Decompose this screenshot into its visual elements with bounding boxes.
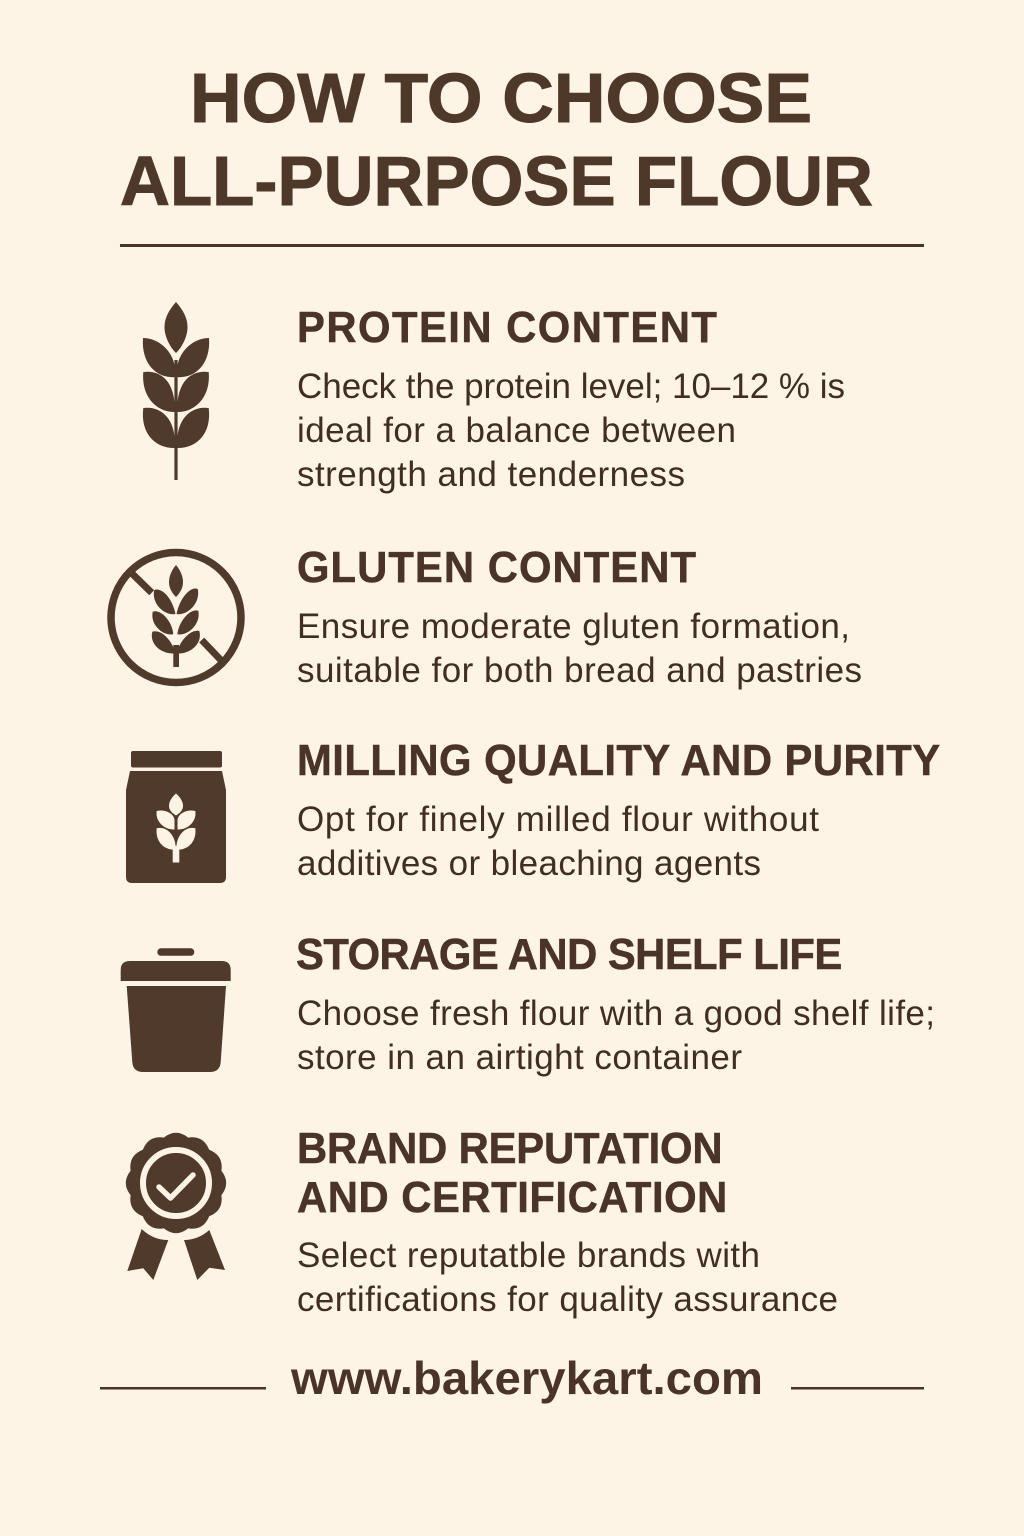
text: gluten content description <box>297 607 862 690</box>
text: milling quality description <box>297 800 819 883</box>
title <box>120 59 873 220</box>
heading: brand reputation and certification: AND CERTIFICATION <box>297 1173 727 1222</box>
heading: gluten content: GLUTEN CONTENT <box>297 543 696 592</box>
text: gluten content description: Ensure moderate gluten formation, <box>297 607 850 646</box>
text: brand description: certifications for quality assurance <box>297 1280 838 1319</box>
heading: brand reputation and certification: BRAND REPUTATION <box>297 1124 723 1173</box>
text: brand description <box>297 1236 838 1319</box>
title: HOW TO CHOOSE <box>190 59 812 137</box>
heading: storage and shelf life: STORAGE AND SHELF LIFE <box>296 930 842 979</box>
text: storage description: store in an airtight container <box>297 1038 742 1077</box>
heading: milling quality and purity: MILLING QUALITY AND PURITY <box>297 736 940 785</box>
icon: flour bag <box>126 751 226 883</box>
icon: wheat <box>143 302 209 480</box>
text: protein content description: strength and tenderness <box>297 455 685 494</box>
text: protein content description <box>297 367 845 494</box>
footer: website: www.bakerykart.com <box>290 1352 763 1404</box>
title: ALL-PURPOSE FLOUR <box>120 142 873 220</box>
icon: crossed-out wheat <box>111 552 241 682</box>
text: protein content description: Check the protein level; 10–12 % is <box>297 367 845 406</box>
text: gluten content description: suitable for both bread and pastries <box>297 651 862 690</box>
text: milling quality description: additives or bleaching agents <box>297 844 761 883</box>
text: storage description <box>297 994 935 1077</box>
heading: protein content: PROTEIN CONTENT <box>297 303 717 352</box>
icon: award badge <box>126 1133 226 1280</box>
text: protein content description: ideal for a balance between <box>297 411 736 450</box>
text: storage description: Choose fresh flour with a good shelf life; <box>297 994 935 1033</box>
text: brand description: Select reputatble brands with <box>297 1236 760 1275</box>
icon: storage container <box>121 948 231 1072</box>
heading: brand reputation and certification <box>297 1124 727 1222</box>
text: milling quality description: Opt for finely milled flour without <box>297 800 819 839</box>
